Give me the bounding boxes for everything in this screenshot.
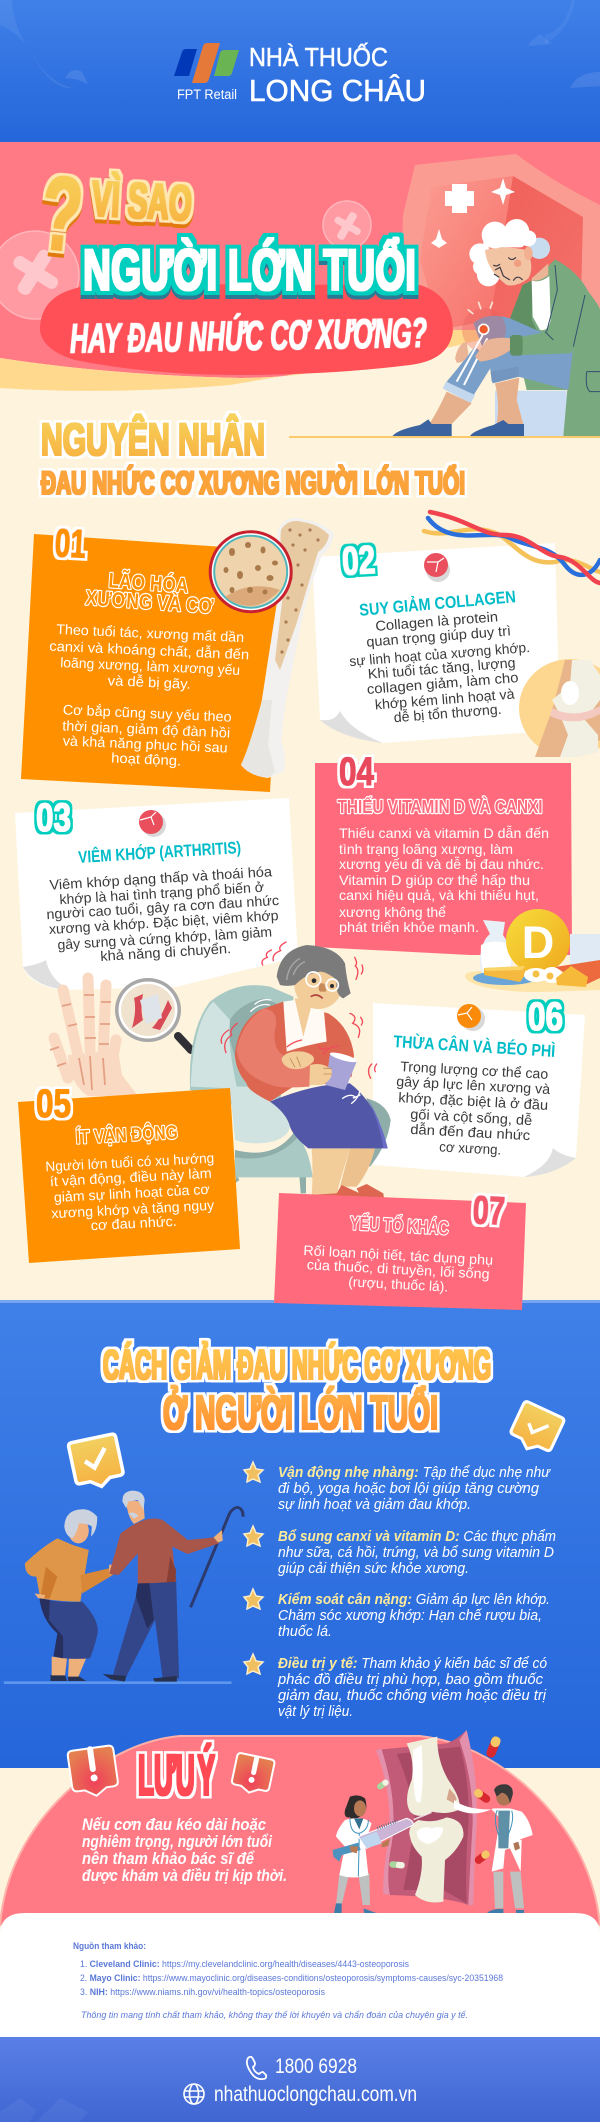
central illustration: shivering senior in armchair [190, 942, 391, 1199]
panel: card 05 low activity [18, 1082, 240, 1263]
body text: khớp kém linh hoạt và [374, 686, 515, 712]
heading: ÍT VẬN ĐỘNG [75, 1121, 178, 1149]
panel: sources [0, 1913, 600, 2037]
icon: collagen strands [424, 512, 600, 583]
icon: star [244, 1462, 263, 1482]
body text: Trọng lượng cơ thể cao [400, 1058, 549, 1082]
icon: femur bone [209, 518, 334, 778]
body text: Vitamin D giúp cơ thể hấp thu [339, 872, 530, 888]
vitamin D ball [506, 909, 570, 973]
body text: tình trạng loãng xương, làm [339, 841, 513, 857]
body text: Khi tuổi tác tăng, lượng [367, 654, 516, 682]
heading: YẾU TỐ KHÁC [349, 1212, 450, 1240]
tip: calcium and vitamin D: Bổ sung canxi và vitamin D: Các thực phẩm [278, 1529, 556, 1545]
tip: weight control: Chăm sóc xương khớp: Hạn chế rượu bia, [278, 1608, 542, 1624]
number 01: 01 [54, 521, 87, 567]
logo wordmark: LONG CHÂU [249, 73, 426, 108]
magnifier: bone tissue [209, 530, 293, 613]
body text: sự linh hoạt của xương khớp. [349, 639, 530, 669]
tip: medical treatment: phác đồ điều trị phù hợp, bao gồm thuốc [277, 1672, 544, 1688]
note text: nghiêm trọng, người lớn tuổi [82, 1832, 273, 1851]
milk glass [570, 934, 600, 975]
icon: blot [424, 553, 450, 582]
body text: cơ đau nhức. [90, 1213, 177, 1233]
body text: khớp là hai tình trạng phổ biến ở [59, 879, 264, 907]
panel: card 07 other factors [274, 1188, 526, 1310]
milk jar [480, 920, 512, 980]
number 02: 02 [341, 538, 376, 584]
body text: giảm sự linh hoạt của cơ [53, 1181, 210, 1205]
body text: và dễ bị gãy. [107, 672, 191, 692]
icons: pills [376, 1735, 502, 1869]
tip: calcium and vitamin D: giúp cải thiện sức khỏe xương. [278, 1561, 469, 1577]
red pill [40, 284, 453, 375]
icon: globe [184, 2084, 204, 2104]
sources list: 1. Cleveland Clinic: https://my.clevelandclinic.org/health/diseases/4443-osteoporosis [80, 1959, 409, 1970]
sources list: 3. NIH: https://www.niams.nih.gov/vi/health-topics/osteoporosis [80, 1987, 325, 1998]
magnifier: joint [115, 978, 191, 1050]
tip: gentle exercise: sự linh hoạt và giảm đau khớp. [278, 1497, 471, 1513]
sources list: 2. Mayo Clinic: https://www.mayoclinic.org/diseases-conditions/osteoporosis/symptoms-causes/syc-20351968 [80, 1973, 503, 1984]
note text: Nếu cơn đau kéo dài hoặc [82, 1815, 266, 1834]
number 04: 04 [339, 750, 375, 794]
body text: xương không thể [339, 904, 446, 920]
tip: medical treatment [277, 1656, 547, 1720]
body text: cơ xương. [439, 1138, 502, 1158]
body text: xương khớp và tăng nguy [51, 1197, 215, 1221]
body text: Viêm khớp dạng thấp và thoái hóa [49, 863, 273, 893]
body text: dễ bị tổn thương. [393, 701, 502, 725]
heading: LÃO HÓA [108, 568, 189, 598]
body text [45, 1150, 215, 1233]
body text [339, 825, 549, 935]
body text: gây áp lực lên xương và [396, 1073, 551, 1097]
number 03: 03 [36, 796, 71, 840]
panel: card 03 arthritis [15, 796, 298, 990]
section heading: NGUYÊN NHÂN: NGUYÊN NHÂN [41, 414, 265, 465]
number 05: 05 [36, 1082, 71, 1126]
illustration: senior couple walking [4, 1491, 243, 1684]
text: LƯU Ý [138, 1743, 215, 1808]
body text: và khả năng phục hồi sau [62, 732, 228, 756]
logo wordmark: NHÀ THUỐC [249, 42, 388, 72]
body text: collagen giảm, làm cho [366, 669, 519, 697]
body text [49, 621, 249, 769]
heading: SUY GIẢM COLLAGEN [358, 587, 517, 620]
icon: question mark: ? [36, 154, 88, 275]
tip: medical treatment: vật lý trị liệu. [278, 1704, 353, 1720]
heading: VIÊM KHỚP (ARTHRITIS) [78, 838, 242, 867]
blue section background [0, 1300, 600, 1768]
tip: gentle exercise: Vận động nhẹ nhàng: Tập thể dục nhẹ như [278, 1465, 552, 1481]
logo wordmark [249, 42, 426, 108]
icon: blot [457, 1004, 485, 1031]
star list [244, 1462, 556, 1720]
tip: gentle exercise [278, 1465, 552, 1513]
body text: xương và khớp. Đặc biệt, viêm khớp [48, 907, 279, 937]
title line: VÌ SAO: VÌ SAO [91, 171, 193, 232]
icon: alert badge left [67, 1743, 119, 1799]
hero background [0, 142, 600, 391]
hero illustration: senior woman holding knee [393, 219, 600, 437]
body text: Cơ bắp cũng suy yếu theo [62, 701, 232, 725]
icon: check badge right [507, 1400, 565, 1458]
panel: card 04 vitamin D [315, 750, 572, 955]
doctor right [447, 1784, 533, 1916]
doctor left [333, 1795, 432, 1917]
body text [396, 1058, 551, 1158]
tip: weight control: Kiểm soát cân nặng: Giảm áp lực lên khớp. [278, 1592, 550, 1608]
body text: canxi và khoáng chất, dẫn đến [49, 638, 249, 662]
disclaimer: Thông tin mang tính chất tham khảo, không thay thế lời khuyên và chẩn đoán của chuyên gia y tế. [81, 2010, 468, 2021]
body text: (rượu, thuốc lá). [348, 1273, 449, 1295]
body text: dẫn đến đau nhức [410, 1121, 531, 1143]
note text [82, 1815, 287, 1885]
icon: phone [247, 2057, 266, 2079]
body text: thời gian, giảm độ đàn hồi [62, 717, 230, 741]
panel: card 01 ageing [21, 521, 283, 792]
number 06: 06 [528, 995, 563, 1039]
body text: hoạt động. [111, 749, 182, 769]
icon: star [244, 1654, 263, 1674]
icon: check badge left [68, 1433, 125, 1491]
panel: card 02 collagen [312, 538, 560, 743]
body text: Người lớn tuổi có xu hướng [45, 1150, 215, 1174]
heading: THỪA CÂN VÀ BÉO PHÌ [393, 1032, 556, 1061]
body text: ít vận động, điều này làm [49, 1165, 212, 1189]
note text: được khám và điều trị kịp thời. [82, 1866, 287, 1885]
phone number: 1800 6928 [275, 2055, 357, 2078]
body text: gây sưng và cứng khớp, làm giảm [57, 923, 272, 953]
body text: xương yếu đi và dễ bị đau nhức. [339, 856, 544, 872]
ground line [289, 436, 600, 438]
tip: weight control: thuốc lá. [278, 1624, 332, 1640]
icon: vitamin D foods [465, 909, 600, 992]
panel: card 06 overweight [373, 995, 585, 1177]
hero shield [400, 154, 600, 340]
body text: Collagen là protein [375, 608, 499, 634]
illustration: doctors treating knee joint [333, 1730, 533, 1917]
section heading: NGUYÊN NHÂN [41, 414, 465, 501]
body text: gối và cột sống, dễ [410, 1106, 533, 1128]
header band [0, 0, 600, 142]
tip: weight control [278, 1592, 550, 1640]
body text [349, 608, 530, 725]
title [36, 154, 453, 375]
icon: arthritic hand [50, 978, 191, 1096]
icon: knee joint [519, 659, 600, 757]
tip: gentle exercise: đi bộ, yoga hoặc bơi lội giúp tăng cường [278, 1481, 539, 1497]
icon: star [244, 1526, 263, 1546]
body text: Rối loạn nội tiết, tác dụng phụ [303, 1242, 494, 1268]
tip: medical treatment: giảm đau, thuốc chống viêm hoặc điều trị [278, 1688, 547, 1704]
icon: sparkles [431, 178, 515, 248]
icon: blot [139, 810, 166, 837]
heading: THIẾU VITAMIN D VÀ CANXI [338, 796, 542, 817]
body text: canxi hiệu quả, và khi thiếu hụt, [339, 887, 539, 903]
body text [46, 863, 279, 964]
hero bubbles [0, 201, 371, 319]
panel: card 01 ageing: XƯƠNG VÀ CƠ [85, 587, 214, 618]
number 07: 07 [472, 1188, 506, 1234]
website: nhathuoclongchau.com.vn [214, 2083, 417, 2106]
logo: FPT Retail: FPT Retail [177, 87, 237, 102]
body text: Thiếu canxi và vitamin D dẫn đến [339, 825, 549, 841]
panel: note arch [0, 1736, 600, 1925]
section heading: relief [103, 1340, 491, 1440]
body text: Theo tuổi tác, xương mất dần [56, 621, 244, 645]
icon: alert badge right [230, 1751, 275, 1797]
tip: medical treatment: Điều trị y tế: Tham khảo ý kiến bác sĩ để có [278, 1656, 547, 1672]
plate, cheese, egg, salmon [473, 971, 537, 985]
tip: calcium and vitamin D [278, 1529, 556, 1577]
icon: medical cross [445, 184, 474, 213]
body text: quan trọng giúp duy trì [366, 622, 512, 650]
body text [303, 1242, 494, 1295]
body text: của thuốc, di truyền, lối sống [306, 1256, 490, 1282]
tip: calcium and vitamin D: như sữa, cá hồi, trứng, và bổ sung vitamin D [278, 1545, 554, 1561]
note text: nên tham khảo bác sĩ để [82, 1849, 255, 1868]
title line: NGƯỜI LỚN TUỔI: NGƯỜI LỚN TUỔI [83, 238, 416, 303]
sources list [80, 1959, 503, 1998]
icon: vitamin D foods: D [522, 917, 554, 968]
body text: khớp, đặc biệt là ở đầu [398, 1089, 549, 1113]
body text: loãng xương, làm xương yếu [60, 654, 240, 678]
body text: người cao tuổi, gây ra cơn đau nhức [46, 892, 279, 922]
body text: phát triển khỏe mạnh. [339, 919, 479, 935]
body text: khả năng di chuyển. [100, 940, 232, 964]
sources heading: Nguồn tham khảo: [73, 1941, 146, 1952]
footer band [0, 2037, 600, 2122]
logo: FPT Retail [174, 43, 239, 102]
icon: star [244, 1589, 263, 1609]
